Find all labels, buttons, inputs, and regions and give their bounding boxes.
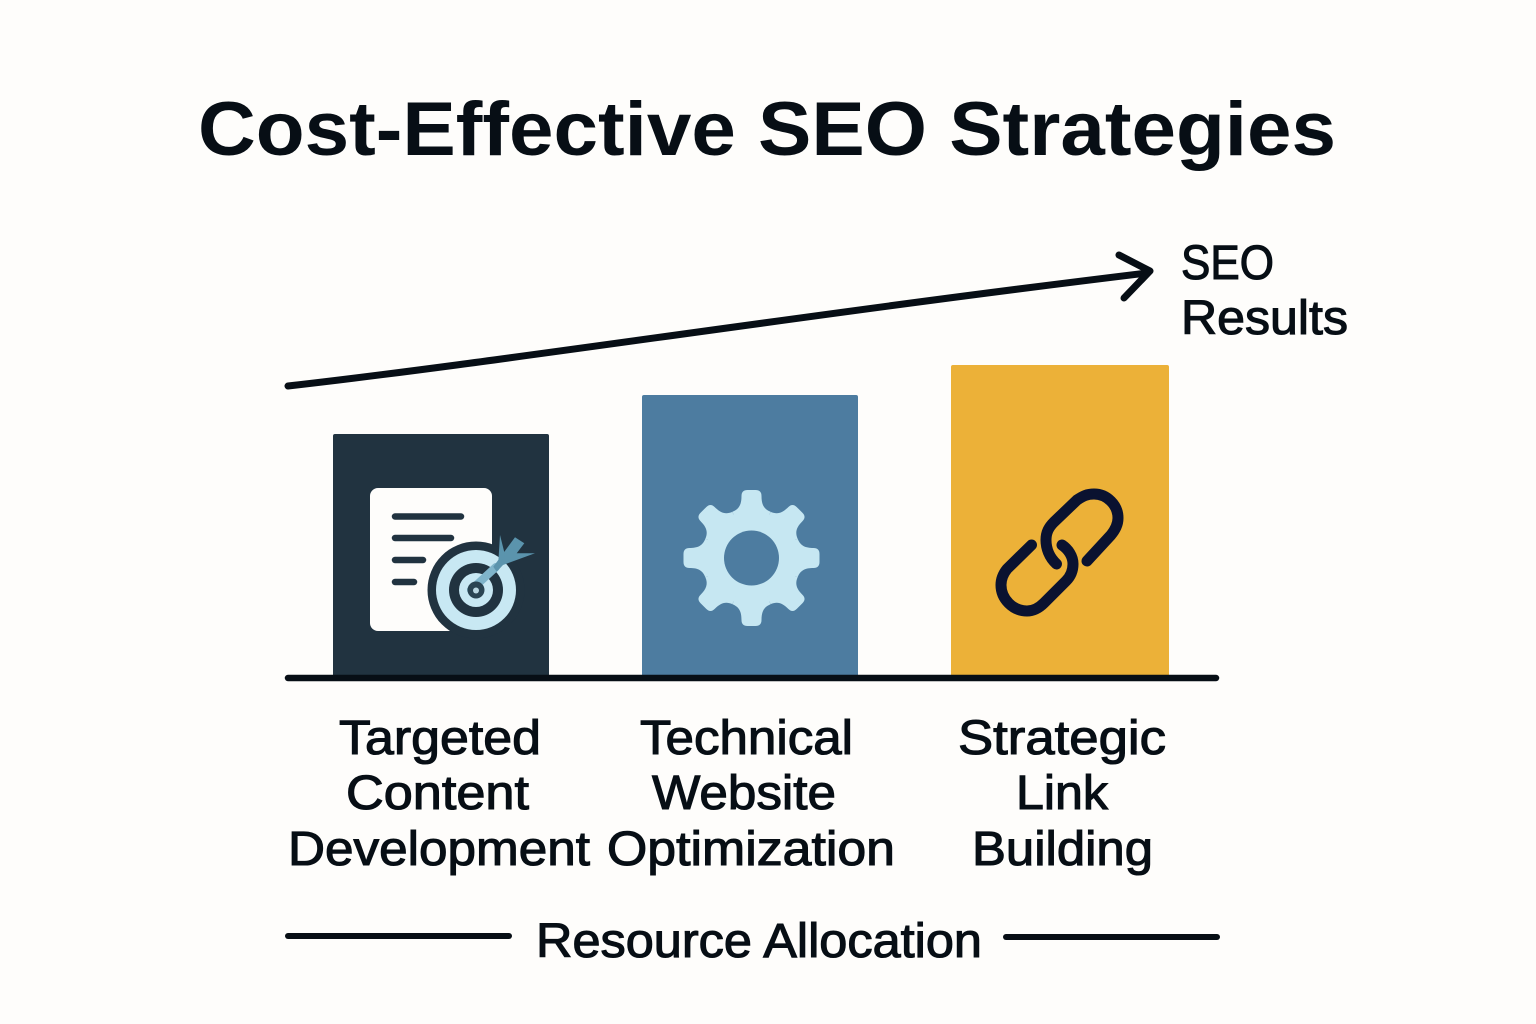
label: Targeted Content Development: Targeted (339, 712, 541, 765)
label: Strategic Link Building: Building (972, 823, 1153, 876)
label: Technical Website Optimization: Technical (640, 712, 853, 765)
bar: Targeted Content Development (333, 434, 549, 677)
arrow: SEO results trend (288, 255, 1150, 386)
icon: gear (684, 490, 820, 626)
label: Technical Website Optimization: Optimization (607, 823, 895, 876)
label: Strategic Link Building: Strategic (958, 712, 1166, 765)
bar: Strategic Link Building (951, 365, 1169, 677)
icon: document with target (370, 488, 535, 638)
bar: Technical Website Optimization (642, 395, 858, 677)
label: SEO Results: Results (1181, 292, 1348, 345)
label: Technical Website Optimization (607, 712, 895, 876)
label: Strategic Link Building (958, 712, 1166, 876)
axis label: Resource Allocation: Resource Allocation (536, 915, 982, 968)
icon: chain link (1001, 494, 1118, 611)
label: SEO Results (1181, 237, 1348, 345)
label: Technical Website Optimization: Website (652, 767, 836, 820)
label: SEO Results: SEO (1181, 237, 1274, 290)
title: Cost-Effective SEO Strategies (198, 87, 1336, 172)
label: Targeted Content Development (288, 712, 590, 876)
label: Targeted Content Development: Content (346, 767, 529, 820)
baseline axis (288, 675, 1216, 681)
label: Strategic Link Building: Link (1016, 767, 1109, 820)
label: Targeted Content Development: Development (288, 823, 590, 876)
